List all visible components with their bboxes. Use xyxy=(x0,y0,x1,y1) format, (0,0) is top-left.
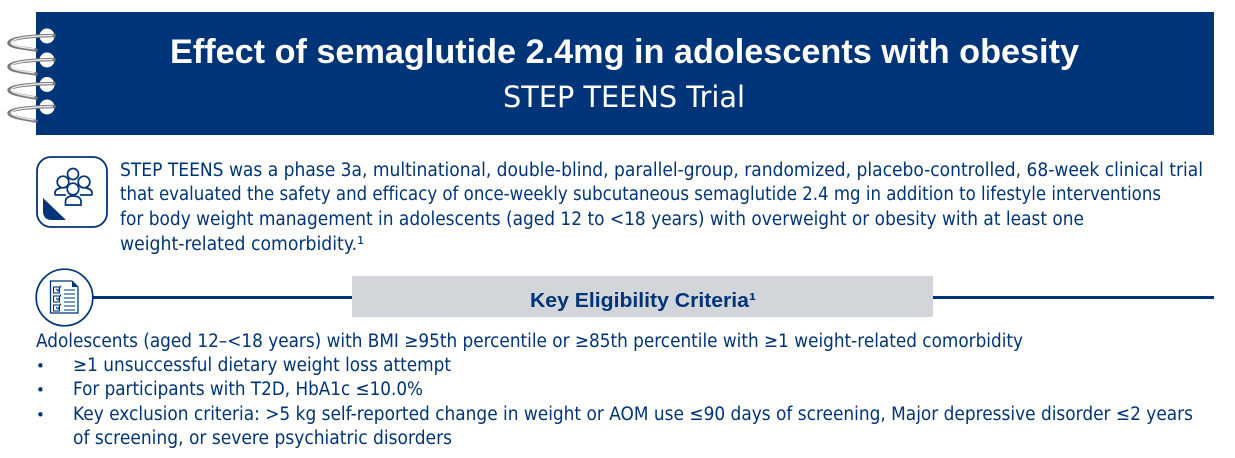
eligibility criteria list: For participants with T2D, HbA1c ≤10.0% xyxy=(73,379,423,400)
eligibility criteria list: • xyxy=(36,381,45,399)
icon: checklist xyxy=(36,269,93,326)
section heading: key eligibility criteria: Key Eligibility Criteria¹ xyxy=(530,290,756,312)
eligibility criteria list: • xyxy=(36,357,45,375)
divider line xyxy=(92,296,1214,299)
section heading: key eligibility criteria xyxy=(352,276,933,317)
icon: participants group xyxy=(37,157,107,227)
intro paragraph xyxy=(120,160,1203,255)
eligibility criteria list: • xyxy=(36,406,45,424)
intro paragraph: for body weight management in adolescents (aged 12 to <18 years) with overweight or obesity with at least one xyxy=(120,209,1084,230)
eligibility criteria list: ≥1 unsuccessful dietary weight loss attempt xyxy=(73,355,451,376)
eligibility criteria list: Adolescents (aged 12–<18 years) with BMI ≥95th percentile or ≥85th percentile with ≥1 weight-related comorbidity xyxy=(36,331,1023,352)
header banner xyxy=(36,12,1214,135)
subtitle: STEP TEENS Trial xyxy=(503,80,745,114)
icon: spiral binding xyxy=(9,28,54,121)
intro paragraph: weight-related comorbidity.¹ xyxy=(120,234,364,255)
eligibility criteria list xyxy=(36,331,1193,449)
title: Effect of semaglutide 2.4mg in adolescents with obesity xyxy=(170,33,1079,71)
eligibility criteria list: of screening, or severe psychiatric disorders xyxy=(73,428,452,449)
